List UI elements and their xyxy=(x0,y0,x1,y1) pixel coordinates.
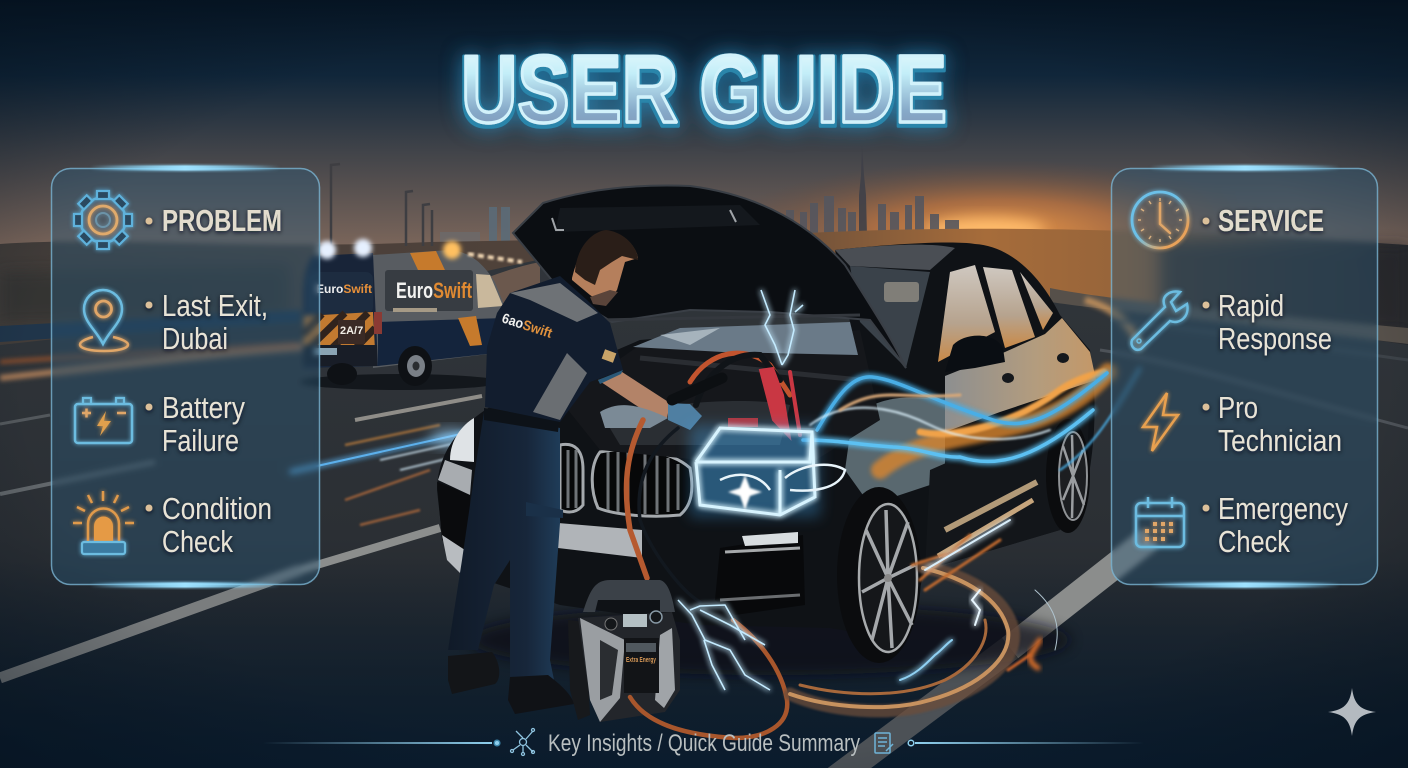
left headlight and corner xyxy=(450,418,474,462)
jumper cables and clamps xyxy=(626,353,800,602)
text: problem: PROBLEM xyxy=(162,203,282,238)
door mirror xyxy=(945,336,1005,372)
glowing battery hologram xyxy=(690,425,845,517)
text: last exit, dubai: Last Exit, xyxy=(162,288,268,323)
icon: document xyxy=(875,733,893,753)
footer text: Key Insights / Quick Guide Summary xyxy=(548,730,860,757)
mechanic xyxy=(448,230,702,714)
icon: location pin xyxy=(80,290,128,351)
head xyxy=(572,231,638,305)
logo on shirt: 6aoSwift xyxy=(500,310,555,341)
text: battery failure: Failure xyxy=(162,423,239,458)
black suv xyxy=(437,186,1096,675)
roof highlight xyxy=(835,245,955,270)
car body xyxy=(437,243,1095,640)
belt xyxy=(484,408,559,432)
icon: gear xyxy=(74,191,132,249)
text: pro technician: Technician xyxy=(1218,423,1342,458)
footer: key insights strip xyxy=(262,728,1145,757)
windshield xyxy=(850,266,930,368)
service van: EuroSwift xyxy=(316,282,372,296)
open hood xyxy=(513,186,906,368)
panel: problem xyxy=(52,166,320,588)
guard rails and light streaks xyxy=(0,288,1408,428)
text: condition check: Condition xyxy=(162,491,272,526)
arm and glove xyxy=(598,372,670,418)
text: last exit, dubai xyxy=(146,288,268,356)
power cable on road xyxy=(630,620,787,738)
front wheel xyxy=(837,487,921,663)
watermark: sparkle xyxy=(1328,688,1376,736)
desert dunes and road surface xyxy=(0,229,1408,768)
icon: wrench xyxy=(1132,292,1188,350)
jump starter power pack xyxy=(568,580,680,722)
text: battery failure: Battery xyxy=(162,390,245,425)
engine bay xyxy=(560,330,880,470)
reflective door panel xyxy=(945,318,1096,432)
icon: warning beacon xyxy=(73,491,134,554)
text: rapid response xyxy=(1202,288,1332,356)
text: condition check xyxy=(146,491,272,559)
trousers xyxy=(448,412,560,690)
title: USER GUIDE xyxy=(461,36,947,143)
text: pro technician xyxy=(1202,390,1342,458)
text: pro technician: Pro xyxy=(1218,390,1258,425)
text: condition check: Check xyxy=(162,524,233,559)
text: service: SERVICE xyxy=(1218,203,1324,238)
road lane markings xyxy=(0,396,1150,768)
text: battery failure xyxy=(146,390,245,458)
icon: network xyxy=(510,728,534,756)
text: emergency check xyxy=(1202,491,1348,559)
icon: calendar xyxy=(1136,497,1184,547)
bumper xyxy=(558,523,642,558)
door handles and side sill highlights xyxy=(1002,373,1014,383)
icon: clock xyxy=(1132,192,1188,248)
panel: service xyxy=(1112,166,1378,588)
shirt xyxy=(485,276,623,422)
text: last exit, dubai: Dubai xyxy=(162,321,228,356)
text: problem xyxy=(146,203,282,238)
icon: battery xyxy=(75,398,132,443)
boots xyxy=(448,652,499,694)
text: rapid response: Response xyxy=(1218,321,1332,356)
rear wheel xyxy=(1046,419,1090,533)
icon: lightning bolt xyxy=(1143,393,1178,451)
energy swoosh on road xyxy=(790,520,1057,711)
grille xyxy=(560,444,692,516)
text: rapid response: Rapid xyxy=(1218,288,1284,323)
energy waves along the car xyxy=(803,368,1140,470)
lightning arcs xyxy=(678,290,803,690)
side windows xyxy=(938,265,995,362)
skyline xyxy=(440,145,959,242)
street lamps xyxy=(331,164,432,248)
text: emergency check: Emergency xyxy=(1218,491,1348,526)
service van: EuroSwift xyxy=(396,278,472,303)
text: emergency check: Check xyxy=(1218,524,1290,559)
service van xyxy=(300,239,522,390)
service van: 2A/7 xyxy=(340,325,363,337)
jump starter power pack: Extra Energy xyxy=(626,657,656,664)
